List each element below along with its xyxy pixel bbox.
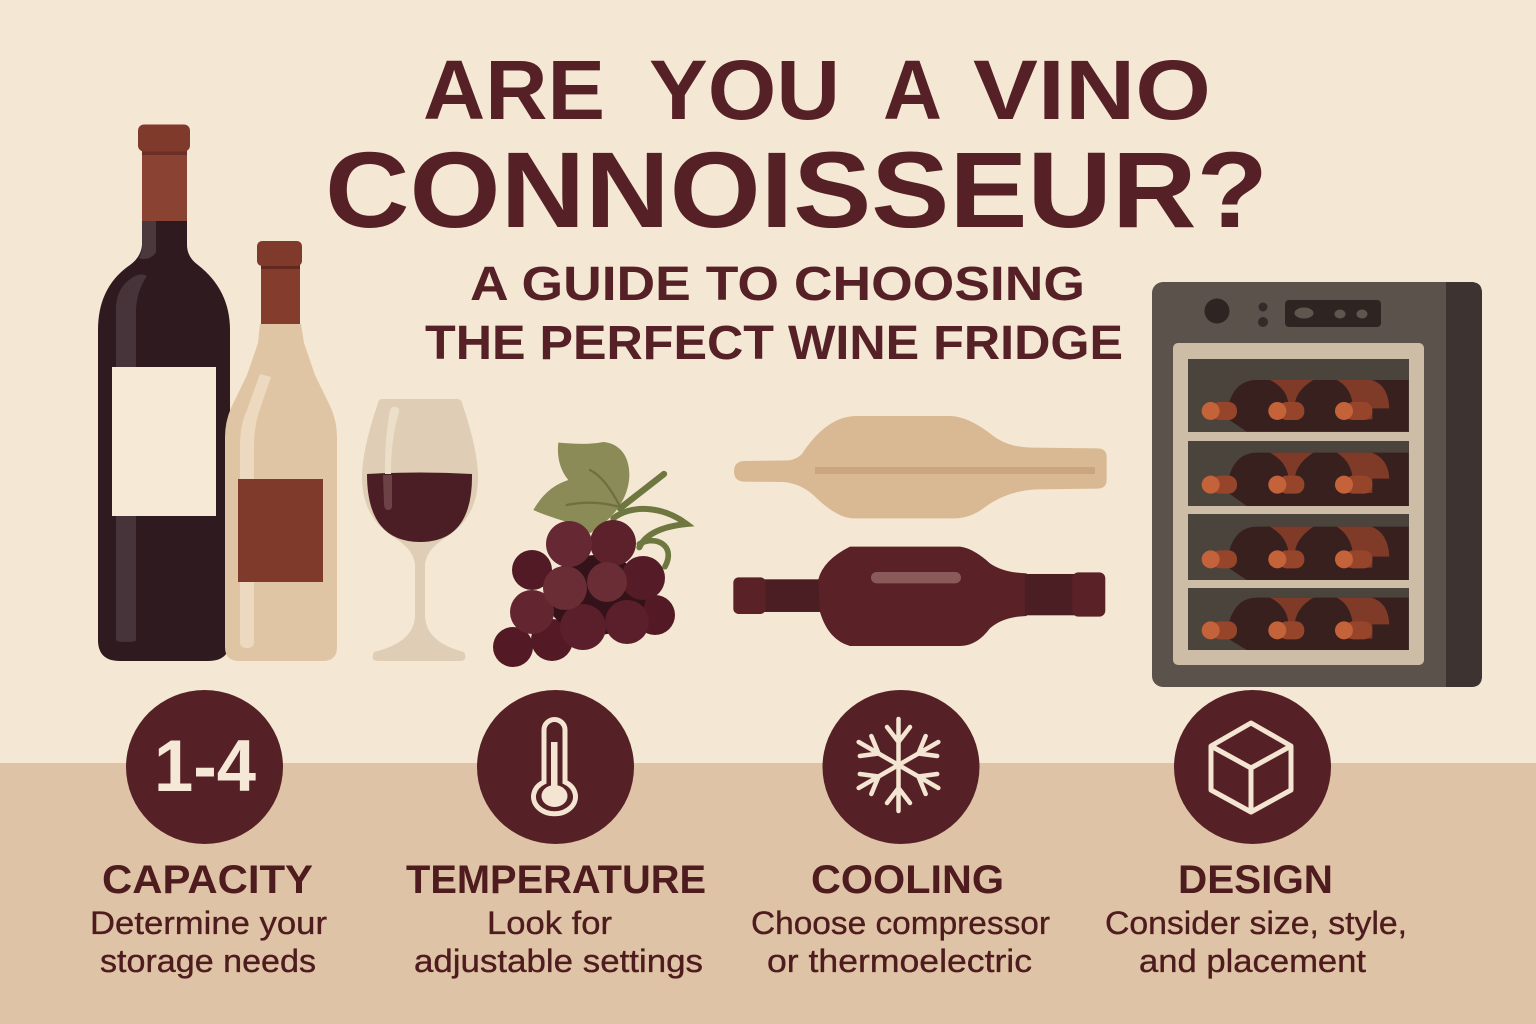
heading: design: DESIGN: [1178, 858, 1333, 902]
heading: cooling: COOLING: [811, 858, 1004, 902]
icon: thermometer: [477, 690, 634, 844]
illustration: tan lying bottle: [734, 416, 1107, 518]
text: capacity description: [90, 905, 327, 979]
text: temperature description: adjustable settings: [414, 943, 703, 979]
title: VINO: [973, 43, 1211, 137]
text: cooling description: or thermoelectric: [767, 943, 1032, 979]
panel: temperature: [406, 690, 706, 979]
shelf 4: [1188, 588, 1409, 650]
title: ARE: [423, 43, 605, 137]
icon: cube: [1174, 690, 1331, 844]
grape stems: [613, 474, 687, 567]
panel: cooling: [751, 690, 1050, 979]
panel: design: [1105, 690, 1407, 979]
fridge cabinet: [1152, 282, 1482, 687]
fridge side panel: [1446, 282, 1482, 687]
counter band: [0, 763, 1536, 1024]
title: A: [883, 43, 942, 137]
fridge controls: [1204, 298, 1381, 327]
heading: capacity: CAPACITY: [102, 858, 313, 902]
title: YOU: [649, 43, 840, 137]
icon: 1-4 badge: 1-4: [154, 726, 256, 807]
panel: capacity: [90, 690, 327, 979]
text: design description: [1105, 905, 1407, 979]
text: capacity description: storage needs: [100, 943, 316, 979]
shelf 1: [1188, 359, 1409, 432]
shelf 2: [1188, 441, 1409, 506]
text: cooling description: [751, 905, 1050, 979]
illustration: maroon lying bottle: [733, 547, 1105, 646]
illustration: white wine bottle: [225, 241, 337, 661]
grape berries: [493, 520, 675, 667]
title: [325, 43, 1268, 250]
illustration: red wine bottle: [98, 124, 230, 661]
fridge door frame: [1173, 343, 1424, 665]
text: design description: and placement: [1139, 943, 1366, 979]
subtitle: A GUIDE TO CHOOSING: [470, 258, 1085, 311]
illustration: wine fridge: [1152, 282, 1482, 687]
text: design description: Consider size, style,: [1105, 905, 1407, 941]
title: CONNOISSEUR?: [325, 129, 1268, 250]
icon: snowflake: [822, 690, 980, 844]
text: cooling description: Choose compressor: [751, 905, 1050, 941]
text: temperature description: [414, 905, 703, 979]
grape leaf: [533, 442, 629, 533]
shelf 3: [1188, 514, 1409, 580]
heading: temperature: TEMPERATURE: [406, 858, 706, 902]
subtitle: THE PERFECT WINE FRIDGE: [425, 317, 1123, 370]
text: temperature description: Look for: [487, 905, 612, 941]
text: capacity description: Determine your: [90, 905, 327, 941]
illustration: wine glass: [362, 399, 478, 661]
subtitle: [425, 258, 1123, 370]
illustration: grapes: [493, 442, 687, 667]
icon: 1-4 badge: [126, 690, 283, 844]
